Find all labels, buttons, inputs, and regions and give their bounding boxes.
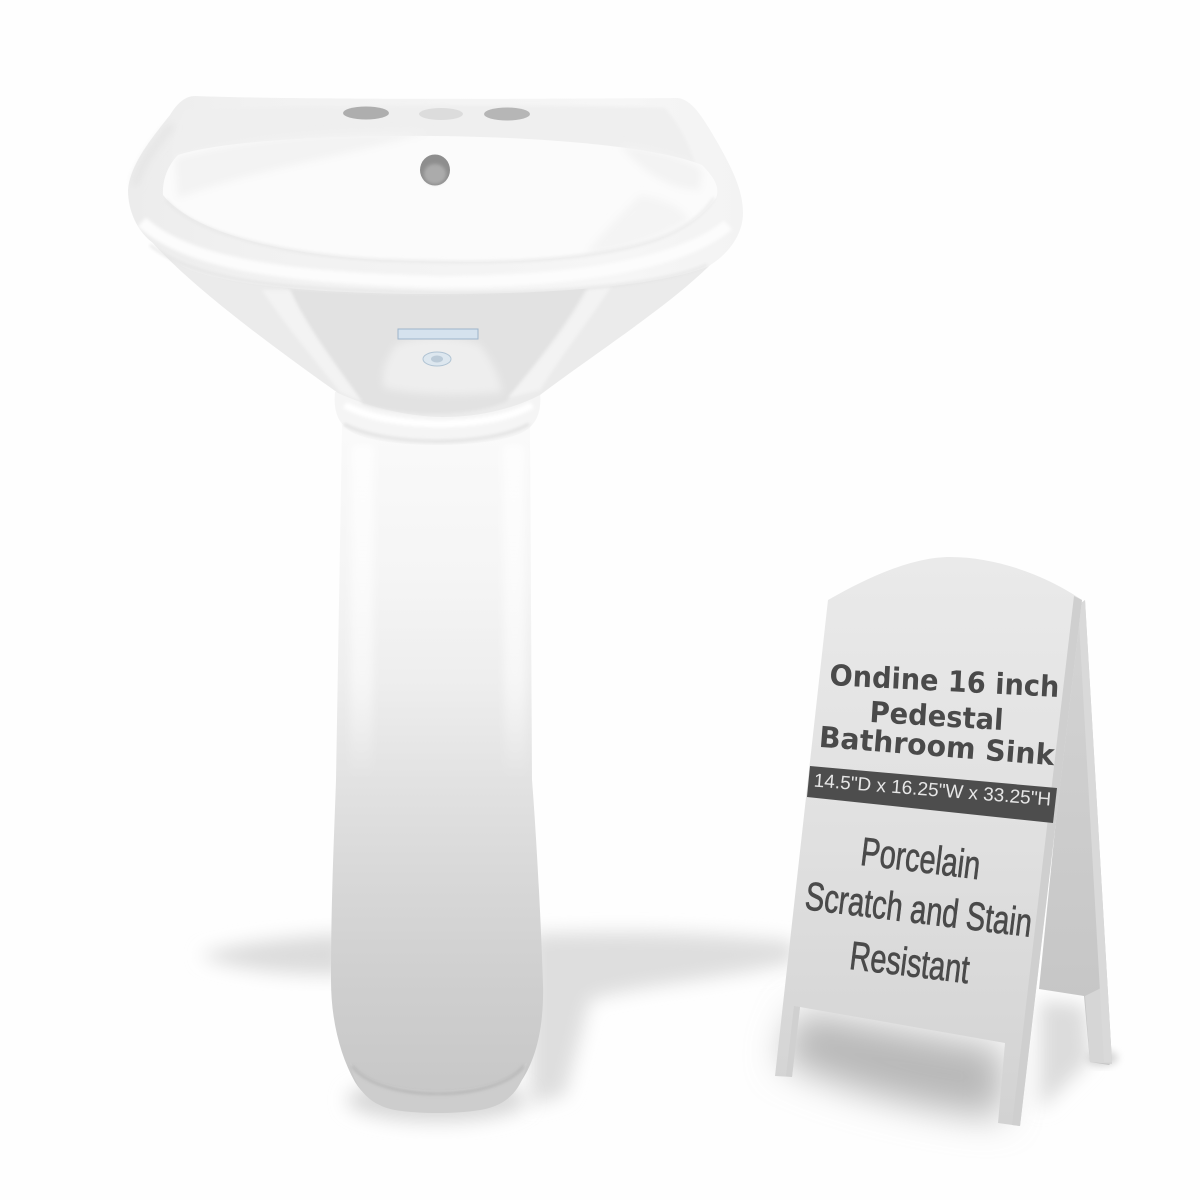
rim outer side shade [135,125,172,185]
sign feature: Resistant: Resistant [847,934,972,992]
faucet hole right [484,108,530,120]
collar [335,392,540,445]
rim lower band highlight [142,222,728,282]
faucet hole left [343,106,389,120]
sign left leg edge [786,1006,800,1077]
underside light strips [262,290,362,402]
faucet deck [172,106,697,170]
sign title: Ondine 16 inch [829,658,1060,704]
basin inner edge [166,198,714,262]
sign back panel [1039,600,1112,1065]
floor shadow of sink [200,932,795,1122]
underside shading [288,285,588,414]
a-frame sign [775,557,1112,1126]
pedestal highlights [350,445,526,780]
rim outer [128,96,743,294]
basin bowl [163,136,717,262]
floor shadow of sign [780,1000,1118,1118]
sign title line 3: Bathroom Sink [818,720,1056,772]
pedestal foot [350,1062,527,1113]
sign feature: Porcelain: Porcelain [858,830,983,888]
sign front panel [775,557,1082,1126]
bowl shading [175,132,430,198]
sign front edge [1012,596,1082,1126]
faucet hole center [419,108,463,120]
pedestal column [331,425,543,1112]
dimension band: 14.5"D x 16.25"W x 33.25"H [813,771,1052,811]
dimension band [807,766,1057,823]
overflow hole [420,154,450,186]
pedestal sink illustration [128,96,743,1113]
basin underside cone [153,240,710,417]
label on underside [398,329,478,366]
sign title line 2: Pedestal [869,695,1005,737]
sign feature: Scratch and Stain: Scratch and Stain [803,874,1034,946]
